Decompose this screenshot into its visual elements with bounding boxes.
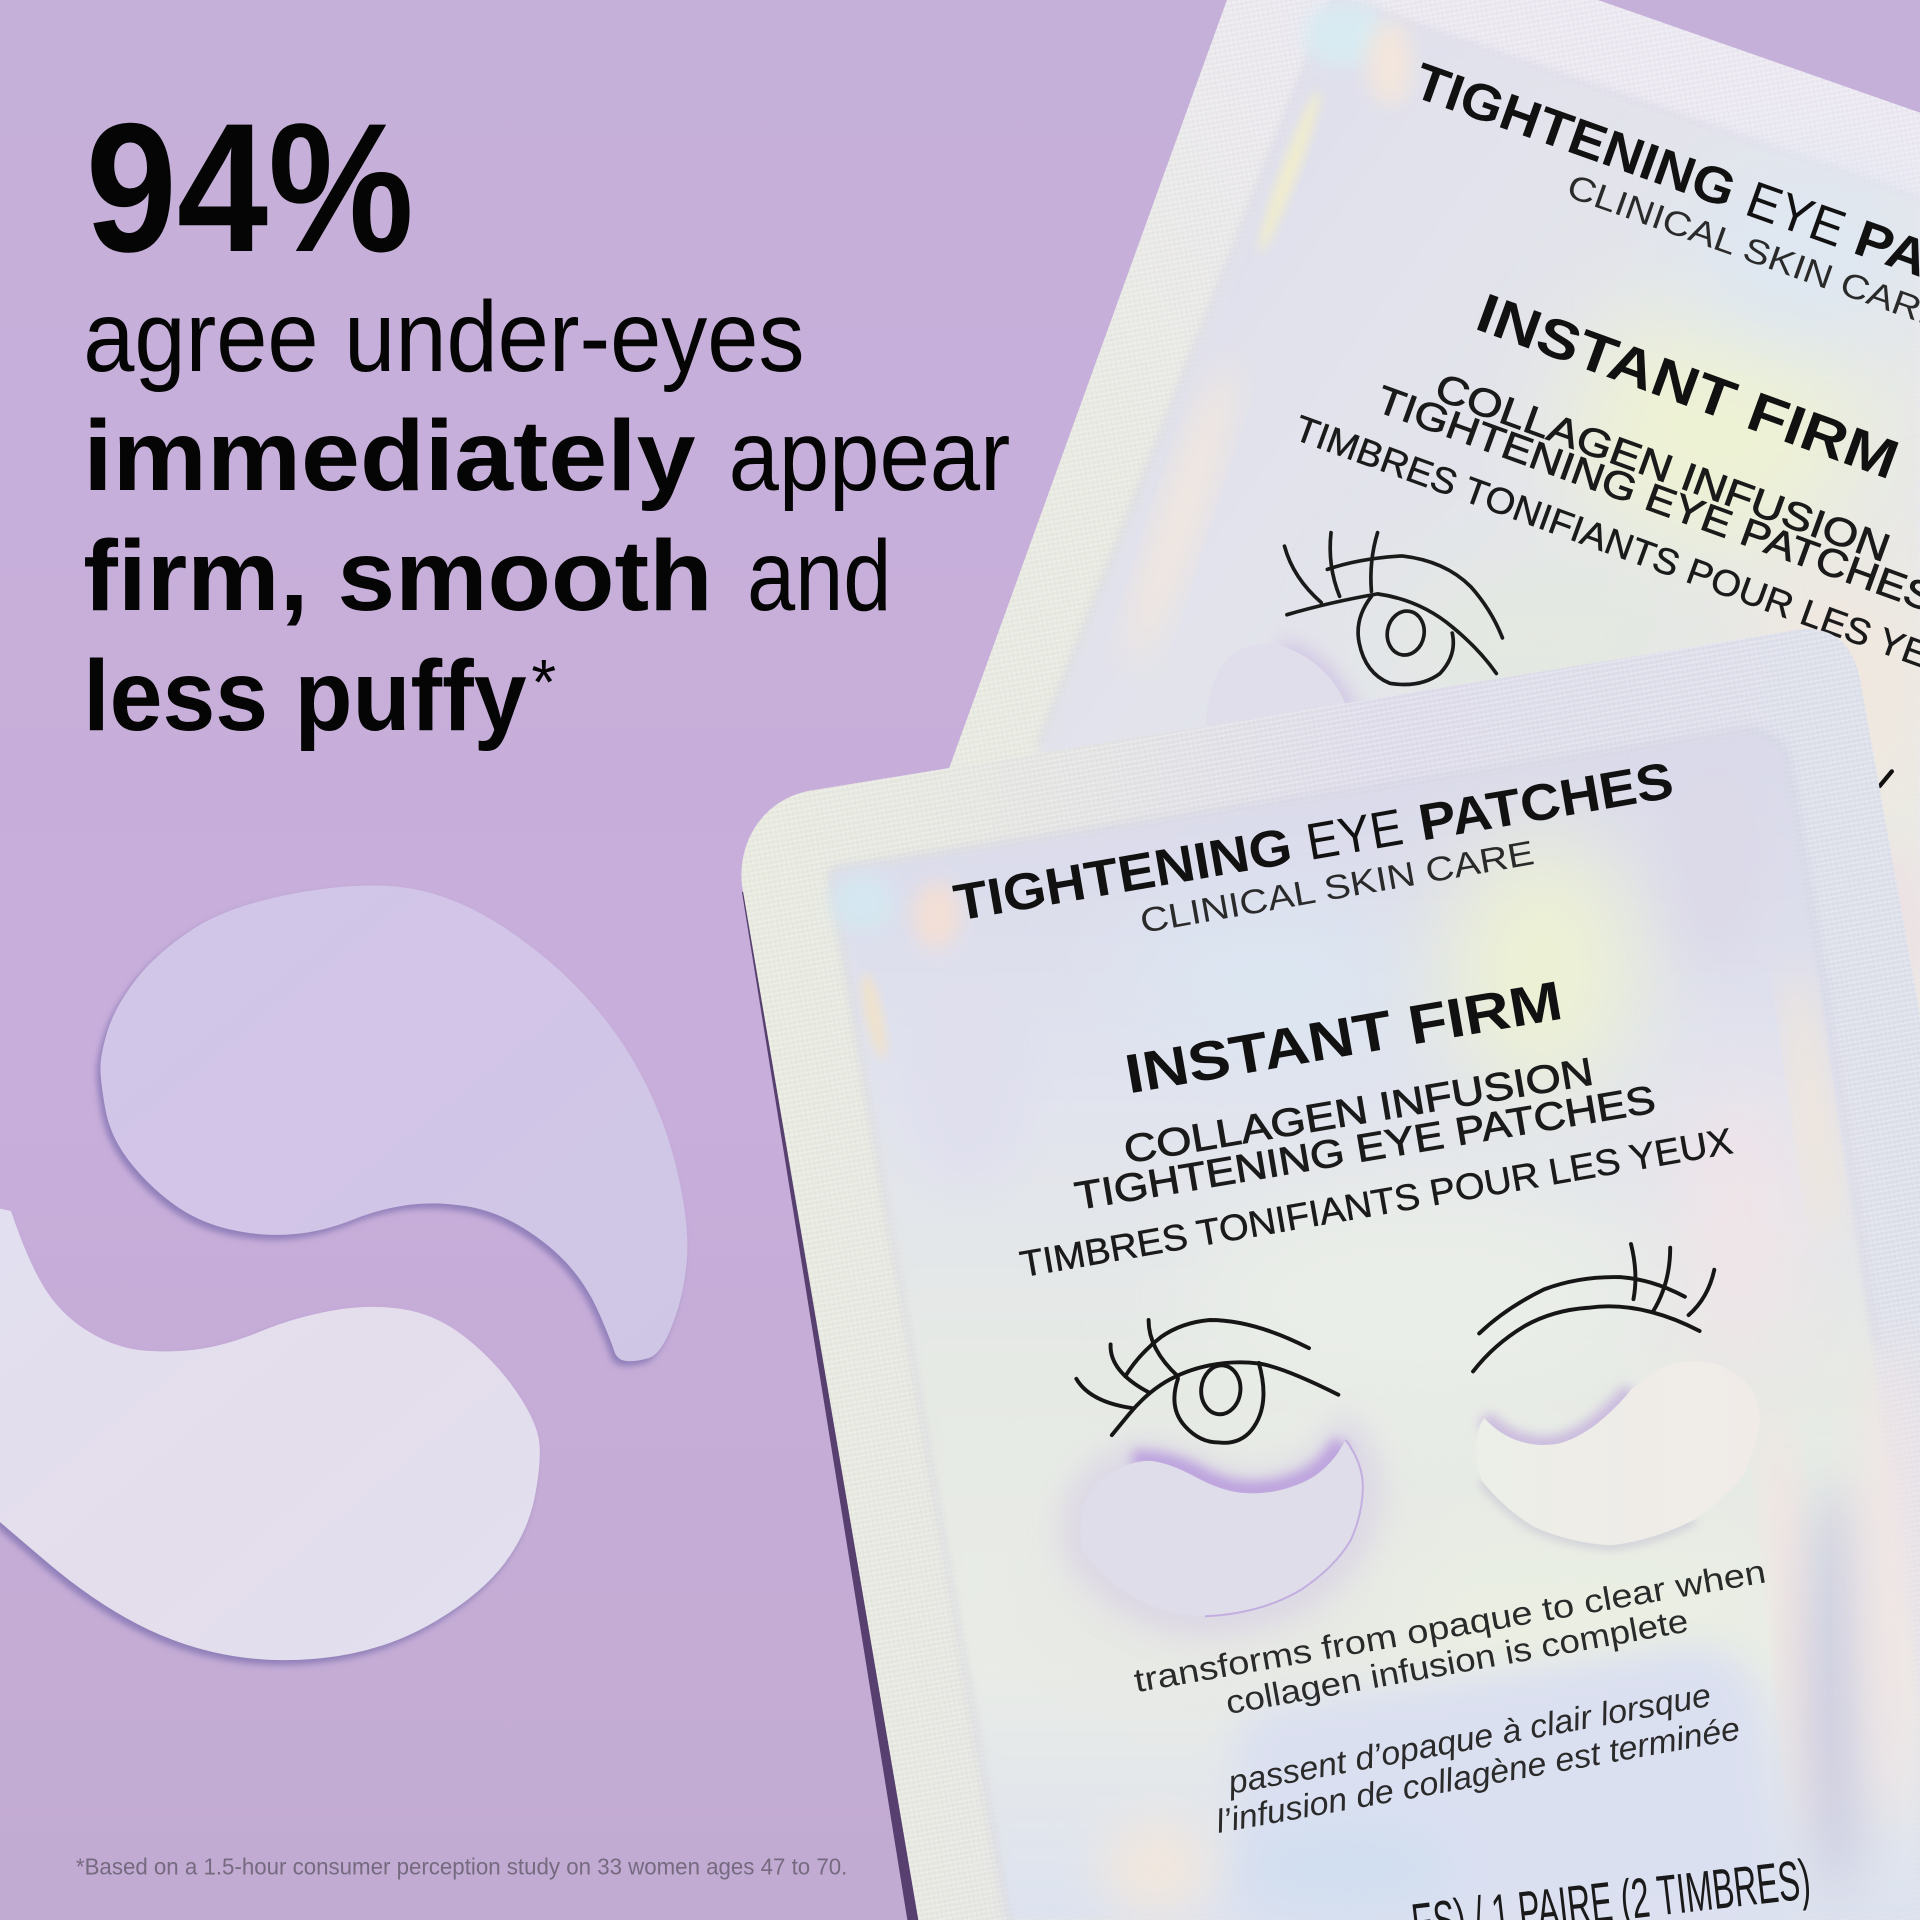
- back sachet heading: EYE: [1739, 170, 1853, 258]
- eye patch: upper: [100, 885, 687, 1361]
- back sachet subheading: CLINICAL SKIN CARE: [1562, 168, 1920, 337]
- front sachet description: TIMBRES TONIFIANTS POUR LES YEUX: [1017, 1120, 1736, 1285]
- back sachet pouch: [1040, 0, 1920, 1010]
- back sachet heading: TIGHTENING: [1407, 51, 1744, 219]
- back sachet patch illustration: [1278, 638, 1359, 704]
- front sachet heading: PATCHES: [1414, 750, 1677, 851]
- headline: statistic: 94%: [86, 85, 414, 290]
- product: back sachet: [949, 0, 1920, 1016]
- front sachet description: TIGHTENING EYE PATCHES: [1072, 1078, 1659, 1219]
- front sachet heading: EYE: [1302, 797, 1407, 871]
- front sachet seal border: [735, 612, 1920, 1920]
- back sachet heading: [1421, 62, 1920, 277]
- headline: claim: appear: [729, 400, 1010, 512]
- front sachet subheading: CLINICAL SKIN CARE: [1137, 834, 1537, 941]
- front sachet open eye drawing: [1076, 1320, 1338, 1443]
- back sachet description: COLLAGEN INFUSION: [1430, 366, 1895, 571]
- headline: claim: agree under-eyes: [83, 281, 804, 393]
- headline: claim: *: [531, 647, 556, 718]
- front sachet English instructions: transforms from opaque to clear when: [1131, 1554, 1769, 1700]
- headline: claim: less puffy: [83, 640, 527, 752]
- back sachet seal border: [949, 0, 1920, 1015]
- front sachet right patch illustration: [1476, 1361, 1760, 1545]
- back sachet lash fragment: [1880, 771, 1892, 786]
- front sachet pouch: [831, 733, 1920, 1920]
- footnote: *Based on a 1.5-hour consumer perception study on 33 women ages 47 to 70.: [76, 1854, 847, 1880]
- front sachet left patch illustration: [1081, 1440, 1363, 1616]
- front sachet English instructions: collagen infusion is complete: [1223, 1603, 1691, 1722]
- headline: claim: immediately: [83, 400, 696, 512]
- headline: claim: [83, 281, 1010, 752]
- back sachet description: TIGHTENING EYE PATCHES: [1371, 378, 1920, 621]
- front sachet French instructions: passent d’opaque à clair lorsque: [1224, 1677, 1714, 1802]
- front sachet closed eye drawing: [1473, 1244, 1714, 1371]
- front sachet heading: [950, 750, 1677, 932]
- front sachet description: [1017, 1051, 1736, 1285]
- front sachet English instructions: [1131, 1554, 1769, 1722]
- back sachet eye drawing: [1284, 533, 1502, 684]
- front sachet French instructions: l’infusion de collagène est terminée: [1213, 1710, 1743, 1841]
- back sachet product name: INSTANT FIRM: [1469, 281, 1907, 491]
- shadow edge of front sachet: [742, 889, 918, 1920]
- product: front sachet: [735, 612, 1920, 1920]
- eye patch: lower: [0, 1209, 540, 1660]
- front sachet product name: INSTANT FIRM: [1120, 969, 1567, 1105]
- headline: claim: and: [747, 520, 891, 632]
- front sachet heading: TIGHTENING: [950, 816, 1296, 932]
- headline: claim: firm, smooth: [83, 520, 713, 632]
- front sachet description: COLLAGEN INFUSION: [1121, 1051, 1596, 1172]
